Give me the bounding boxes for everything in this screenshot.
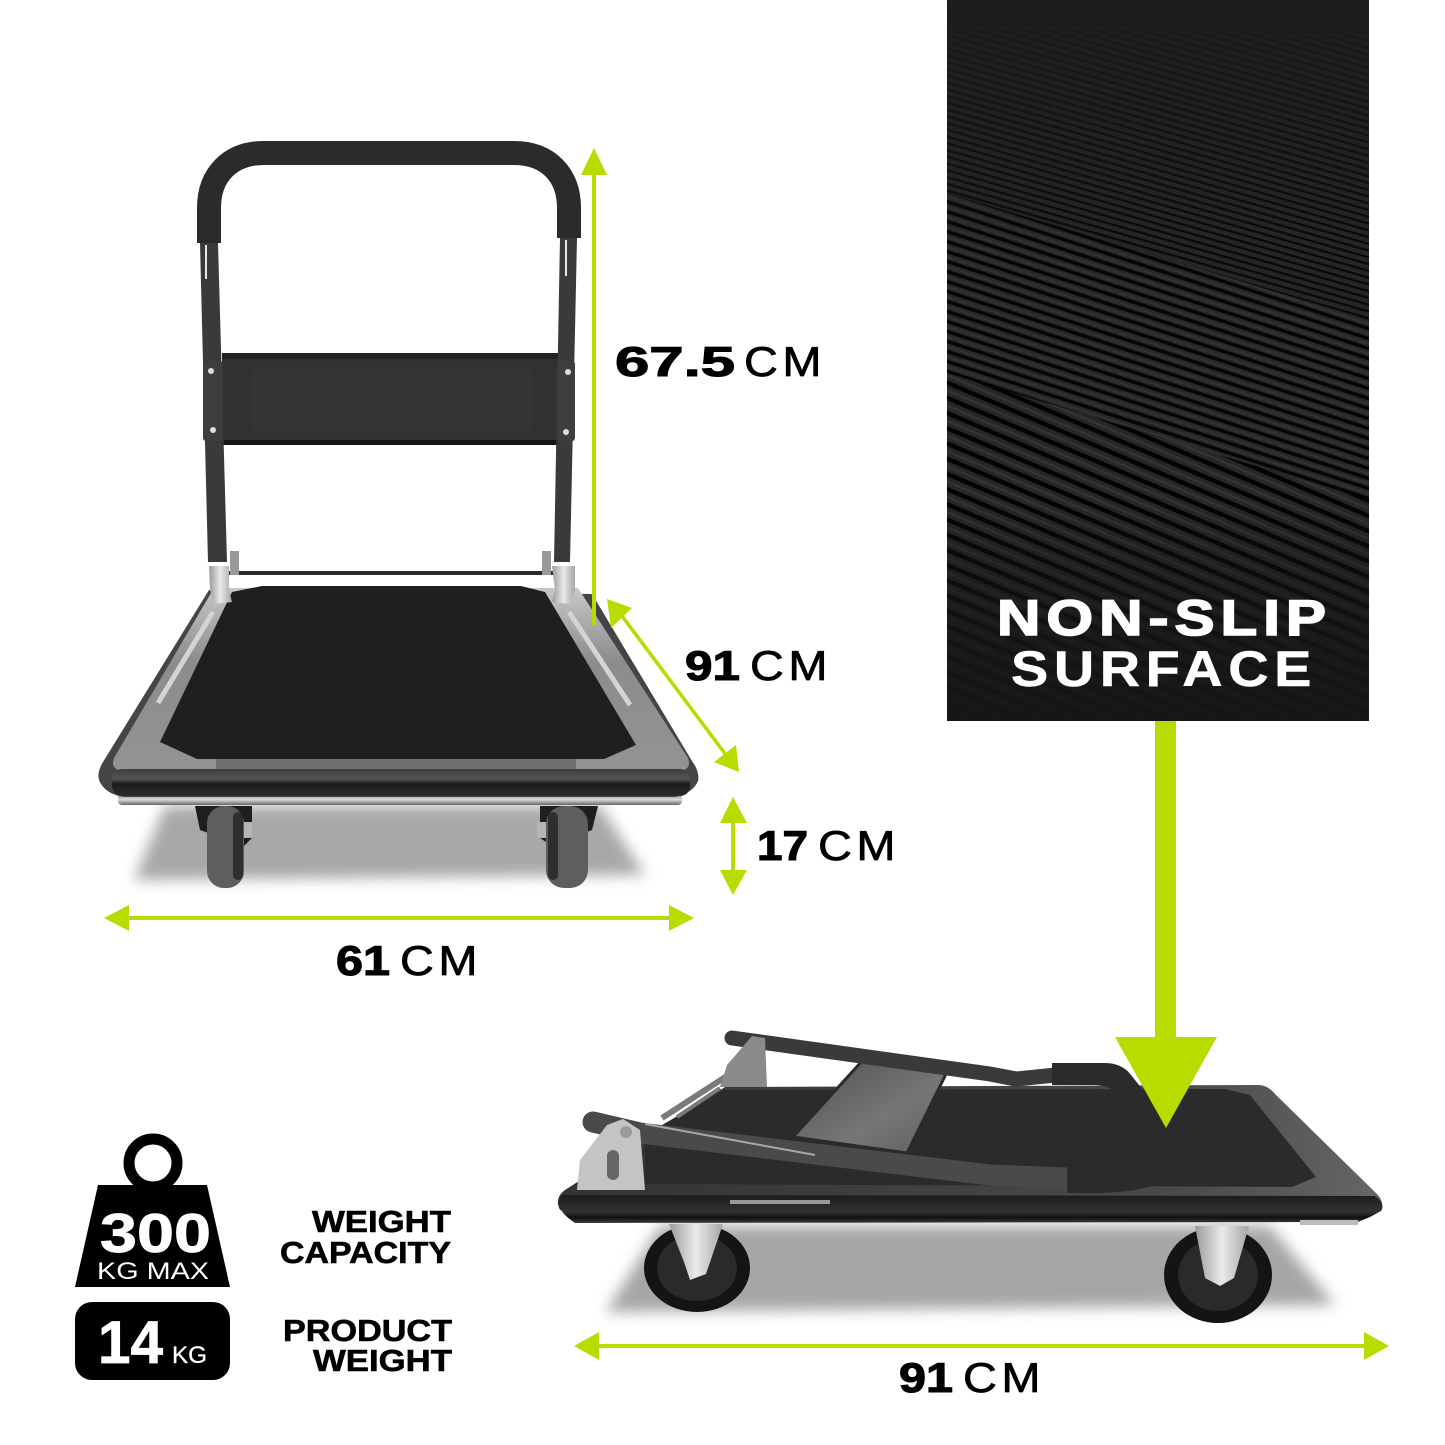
post highlights [205, 240, 567, 279]
front deck edge [112, 769, 690, 796]
label: product weight [283, 1313, 452, 1378]
dimension: 67.5 cm: CM [744, 338, 826, 385]
arrow: clearance 17 cm [720, 797, 747, 895]
dimension: 17 cm [757, 822, 900, 869]
heading: non-slip surface: NON-SLIP [997, 590, 1332, 646]
label: weight capacity: WEIGHT [312, 1204, 451, 1239]
icon: weight capacity 300 kg max: 300 [100, 1202, 211, 1264]
chrome rail under deck [118, 794, 682, 805]
dimension: 91 cm length: 91 [899, 1354, 953, 1401]
upper handle bar [732, 1038, 1056, 1079]
front hinge bracket [577, 1119, 645, 1190]
arrow: width 61 cm [104, 905, 694, 931]
icon: product weight 14 kg [75, 1302, 230, 1380]
arrow: non-slip callout pointer [1115, 721, 1217, 1128]
left wheel [195, 806, 252, 888]
dimension: 61 cm: 61 [336, 937, 390, 984]
dimension: 91 cm depth: 91 [685, 642, 740, 689]
heading: non-slip surface: SURFACE [1011, 641, 1317, 697]
deck rim [98, 590, 698, 797]
dimension: 61 cm [336, 937, 482, 984]
folded brace rails [662, 1063, 747, 1118]
dimension: 67.5 cm: 67.5 [615, 338, 735, 385]
dimension: 17 cm: CM [818, 822, 900, 869]
right wheel [537, 806, 598, 888]
dimension: 91 cm depth [685, 642, 832, 689]
rear wheel [644, 1224, 750, 1312]
deck front edge [559, 1195, 1383, 1225]
label: weight capacity: CAPACITY [280, 1235, 451, 1270]
dimension: 67.5 cm [615, 338, 826, 385]
icon: product weight 14 kg: 14 [98, 1309, 164, 1376]
dimension: 91 cm length [899, 1354, 1045, 1401]
floor shadow [606, 1226, 1335, 1312]
arrow: depth 91 cm [607, 599, 739, 772]
heading: non-slip surface [997, 590, 1332, 697]
icon: weight capacity 300 kg max [75, 1139, 230, 1287]
lower handle bar [593, 1122, 1068, 1178]
deck surface [113, 588, 689, 771]
non-slip mat [645, 1089, 1316, 1187]
arrow: height 67.5 cm [581, 148, 607, 625]
front band shade [216, 758, 576, 770]
panel: non-slip surface [947, 0, 1369, 721]
icon: product weight 14 kg: KG [172, 1342, 207, 1369]
dimension: 91 cm length: CM [963, 1354, 1045, 1401]
lower bar highlight [645, 1124, 815, 1155]
floor shadow [134, 806, 645, 880]
dimension: 17 cm: 17 [757, 822, 808, 869]
label: product weight: WEIGHT [313, 1343, 452, 1378]
product: trolley front view [98, 153, 698, 888]
back hinge bracket [720, 1036, 767, 1087]
arrow: length 91 cm [574, 1332, 1389, 1360]
ribbed rubber texture [947, 0, 1369, 721]
cross rod [226, 571, 556, 575]
deck surface [558, 1085, 1382, 1210]
dimension: 61 cm: CM [400, 937, 482, 984]
folded back panel [793, 1060, 947, 1153]
back panel of handle [203, 353, 575, 445]
non-slip mat [160, 586, 636, 759]
product: trolley side view folded [558, 1036, 1383, 1323]
right hinge [542, 551, 575, 604]
front wheel [1164, 1226, 1272, 1323]
label: product weight: PRODUCT [283, 1313, 452, 1348]
folded grip [1052, 1063, 1188, 1193]
dimension: 91 cm depth: CM [750, 642, 832, 689]
deck side slots [158, 612, 630, 705]
handle posts [200, 238, 577, 562]
handle grip [209, 153, 569, 243]
left hinge [209, 551, 239, 604]
label: weight capacity [280, 1204, 451, 1270]
icon: weight capacity 300 kg max: KG MAX [97, 1258, 209, 1285]
